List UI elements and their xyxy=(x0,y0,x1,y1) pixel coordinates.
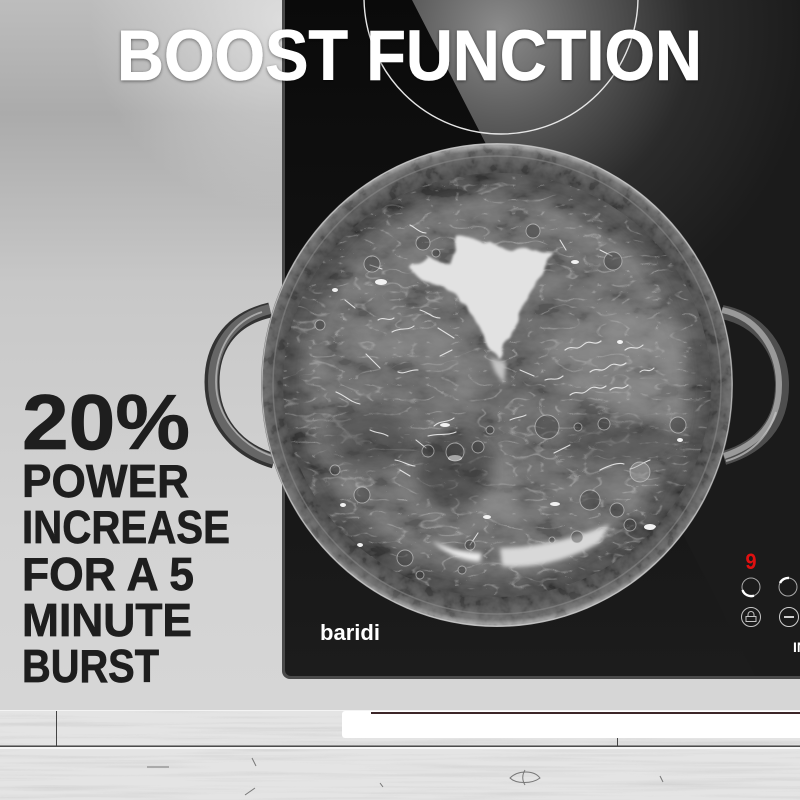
induction hob glass xyxy=(282,0,800,679)
steel pot xyxy=(260,140,736,630)
bubbles xyxy=(315,224,686,579)
line: for a 5: FOR A 5 xyxy=(22,548,194,600)
bottom crescent highlight: left lobe xyxy=(432,540,482,562)
line: burst: BURST xyxy=(22,640,159,692)
light mid band xyxy=(350,314,478,408)
lock button xyxy=(742,608,760,626)
reflection glow on glass xyxy=(412,0,800,334)
pot rim xyxy=(261,143,733,627)
line: increase: INCREASE xyxy=(22,501,230,553)
line: power: POWER xyxy=(22,455,189,507)
baridi logo: baridi xyxy=(320,620,380,645)
boiling water xyxy=(280,170,714,600)
slider ring right xyxy=(779,578,797,596)
dark sunken areas xyxy=(415,432,495,508)
left pot handle xyxy=(212,309,274,461)
callout: 20% power increase xyxy=(22,378,230,692)
burner control panel xyxy=(742,550,800,655)
highlight speckles xyxy=(332,260,683,547)
stat number: 20% xyxy=(22,378,190,466)
minus button xyxy=(780,608,798,626)
slider ring left xyxy=(742,578,760,596)
top V highlight xyxy=(408,236,552,360)
title: BOOST FUNCTION xyxy=(117,17,702,96)
line: minute: MINUTE xyxy=(22,594,192,646)
wood plank floor xyxy=(0,711,800,800)
right pot handle xyxy=(722,310,782,461)
bottom crescent highlight: right lobe xyxy=(500,524,610,567)
ripple glints xyxy=(336,225,654,545)
centre highlight streak xyxy=(490,358,506,384)
cooking zone ring xyxy=(364,0,638,134)
white oven panel below the hob xyxy=(342,711,800,738)
power level digit: 9 xyxy=(745,550,757,576)
